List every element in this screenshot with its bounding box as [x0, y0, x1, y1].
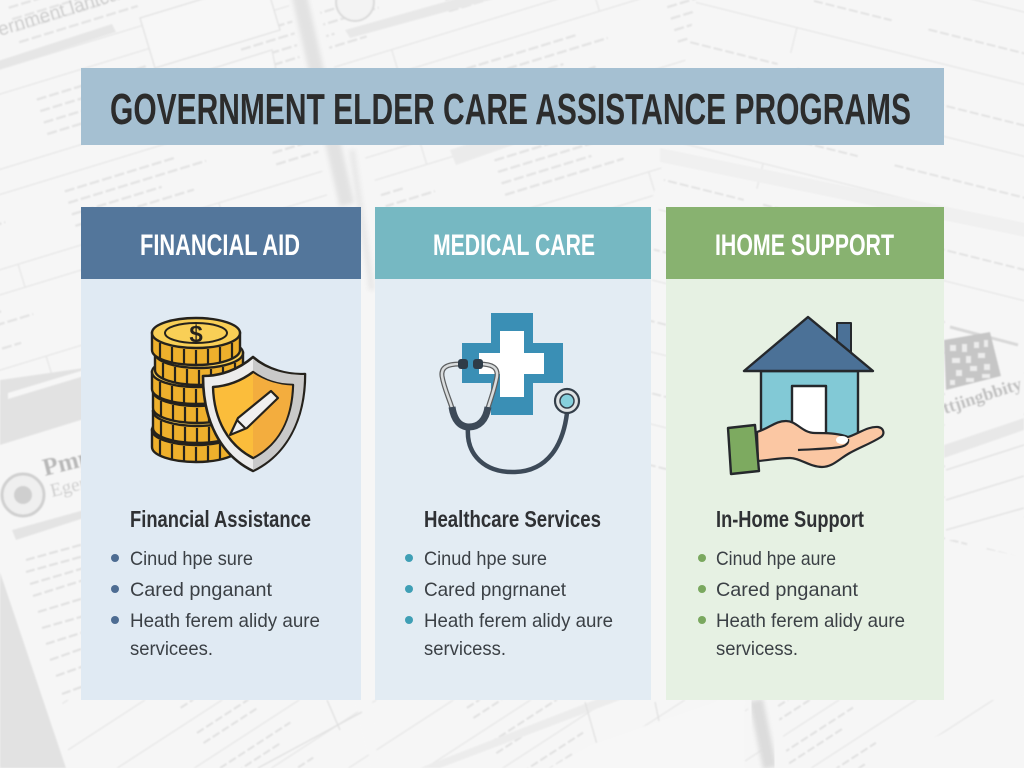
icon: medical cross with stethoscope: [442, 313, 579, 472]
icon: house on open hand: [728, 317, 883, 474]
bullet list: home: Cinud hpe aure: [716, 548, 836, 570]
form sheet: bottom left: [0, 419, 102, 768]
bullet list: medical: [405, 548, 613, 660]
subheading: in-home support: In-Home Support: [716, 506, 864, 532]
bullet list: medical: servicess.: [424, 638, 506, 660]
subheading: healthcare services: Healthcare Services: [424, 506, 601, 532]
icon: coin stack with shield: [152, 318, 305, 471]
gray gap at the lower left edge: [0, 572, 66, 768]
bullet list: home: servicess.: [716, 638, 798, 660]
bullet list: medical: Heath ferem alidy aure: [424, 610, 613, 632]
gray gap below the top left sheet: [0, 368, 84, 446]
bullet list: home: [698, 548, 905, 660]
form sheet: top left: [0, 0, 346, 400]
bullet list: financial: Cared pnganant: [130, 579, 273, 601]
bullet list: home: Cared pnganant: [716, 579, 859, 601]
form sheet: bottom centre: [62, 698, 768, 768]
bullet list: medical: Cinud hpe sure: [424, 548, 547, 570]
title banner: [81, 68, 944, 145]
form sheet: top centre: [312, 0, 720, 240]
panel: home support: [666, 207, 944, 700]
form sheet: bottom left: Egen: [48, 472, 92, 502]
heading: home support: IHOME SUPPORT: [715, 229, 894, 262]
heading: financial aid: FINANCIAL AID: [140, 229, 300, 262]
panel: financial aid: [81, 207, 361, 700]
bullet list: financial: Cinud hpe sure: [130, 548, 253, 570]
bullet list: financial: servicees.: [130, 638, 213, 660]
bullet list: medical: Cared pngrnanet: [424, 579, 567, 601]
bullet list: financial: Heath ferem alidy aure: [130, 610, 320, 632]
form sheet: top right: [640, 0, 1024, 560]
bullet list: financial: [111, 548, 320, 660]
side shadows between sheets: [298, 0, 347, 205]
panel: medical care: [375, 207, 651, 700]
form sheet: right with QR code: ttjingbbity: [940, 373, 1024, 418]
icon: coin stack with shield: $: [189, 321, 203, 348]
bullet list: home: Heath ferem alidy aure: [716, 610, 905, 632]
form sheet: bottom right: [775, 695, 1024, 768]
subheading: financial assistance: Financial Assistance: [130, 506, 311, 532]
form sheet: right with QR code: [940, 320, 1024, 540]
form sheet: bottom left: Pmpl: [40, 442, 102, 482]
heading: medical care: MEDICAL CARE: [433, 229, 595, 262]
